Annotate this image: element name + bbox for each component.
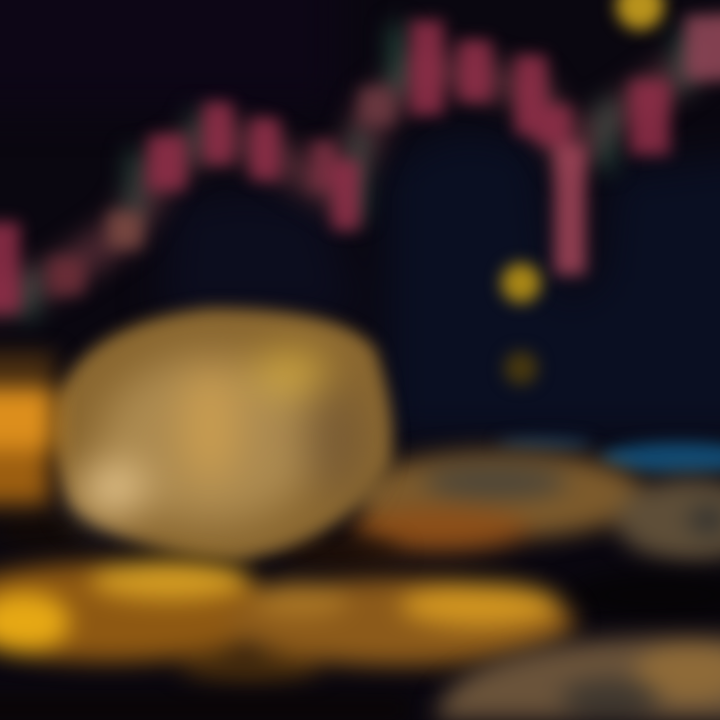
candlestick chart line (0, 25, 720, 320)
green wicks glow (22, 25, 690, 320)
bottom right coin (435, 636, 720, 720)
lower gold coin row (0, 560, 575, 682)
stacked coins, right (350, 451, 720, 562)
dark navy chart backdrop (0, 0, 720, 440)
dark gaps between coins (0, 520, 720, 619)
left edge coin stack (0, 355, 55, 505)
bottom dark strip (0, 698, 410, 720)
blue glow on the horizon (497, 437, 720, 474)
muted chart band (0, 30, 720, 305)
red candles (0, 15, 720, 312)
large gold coin (52, 308, 392, 560)
yellow dots (501, 0, 664, 385)
